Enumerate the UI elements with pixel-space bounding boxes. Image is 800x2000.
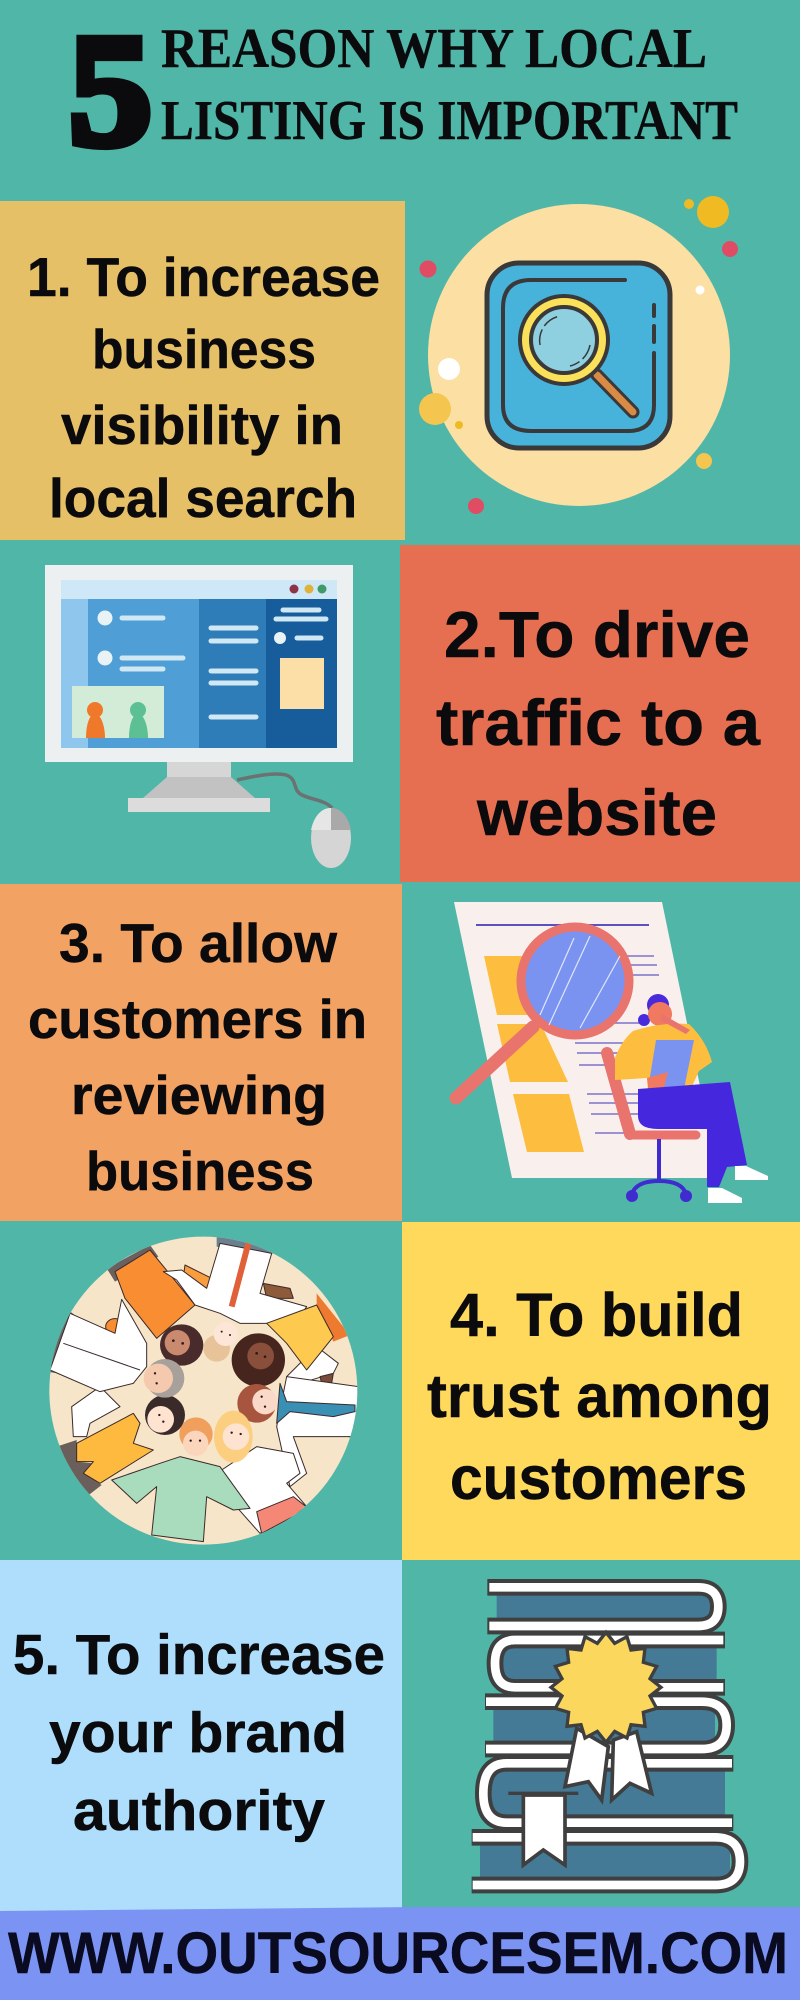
- panel 2: traffic text: [400, 545, 800, 882]
- title line 2: LISTING IS IMPORTANT: [161, 90, 738, 152]
- panel 2: traffic text: 2.To drive: [444, 598, 750, 671]
- panel 5: authority text: authority: [73, 1779, 325, 1843]
- icon: desktop computer with mouse: [45, 565, 353, 868]
- icon: woman reviewing document with magnifier: [454, 902, 768, 1203]
- man in green: [179, 1417, 213, 1456]
- man at top: [203, 1322, 238, 1362]
- panel 4: trust text: [402, 1222, 800, 1560]
- panel 2: traffic text: website: [476, 776, 717, 849]
- panel 5: authority text: your brand: [49, 1701, 347, 1765]
- panel 5: authority text: [0, 1560, 402, 1912]
- panel 3: reviews text: business: [86, 1140, 314, 1202]
- panel 1: visibility text: local search: [49, 467, 357, 529]
- icon: magnifier in app tile: [419, 196, 738, 514]
- panel 3: reviews text: 3. To allow: [59, 912, 337, 974]
- panel 2: traffic text: traffic to a: [436, 686, 761, 759]
- panel 1: visibility text: visibility in: [61, 394, 343, 456]
- blonde woman: [214, 1411, 253, 1463]
- icon: team in a circle: [47, 1235, 362, 1545]
- panel 1: visibility text: 1. To increase: [27, 246, 380, 308]
- red haired woman: [237, 1384, 278, 1423]
- panel 3: reviews text: [0, 884, 402, 1221]
- woman in orange: [160, 1324, 203, 1366]
- panel 3: reviews text: reviewing: [71, 1064, 327, 1126]
- panel 3: reviews text: customers in: [28, 988, 367, 1050]
- title line 1: REASON WHY LOCAL: [161, 18, 707, 80]
- panel 5: authority text: 5. To increase: [13, 1623, 385, 1687]
- panel 4: trust text: trust among: [427, 1362, 772, 1430]
- curly haired woman: [232, 1333, 285, 1387]
- icon: stacked books with award seal: [472, 1587, 740, 1885]
- big numeral 5: 5: [69, 1, 152, 179]
- title: [69, 1, 738, 179]
- panel 4: trust text: 4. To build: [450, 1281, 743, 1349]
- panel 1: visibility text: [0, 201, 405, 540]
- footer: website banner: [0, 1907, 800, 2000]
- woman with dark hair: [145, 1395, 185, 1435]
- panel 4: trust text: customers: [450, 1444, 747, 1512]
- panel 1: visibility text: business: [92, 318, 316, 380]
- grey haired man: [144, 1359, 184, 1398]
